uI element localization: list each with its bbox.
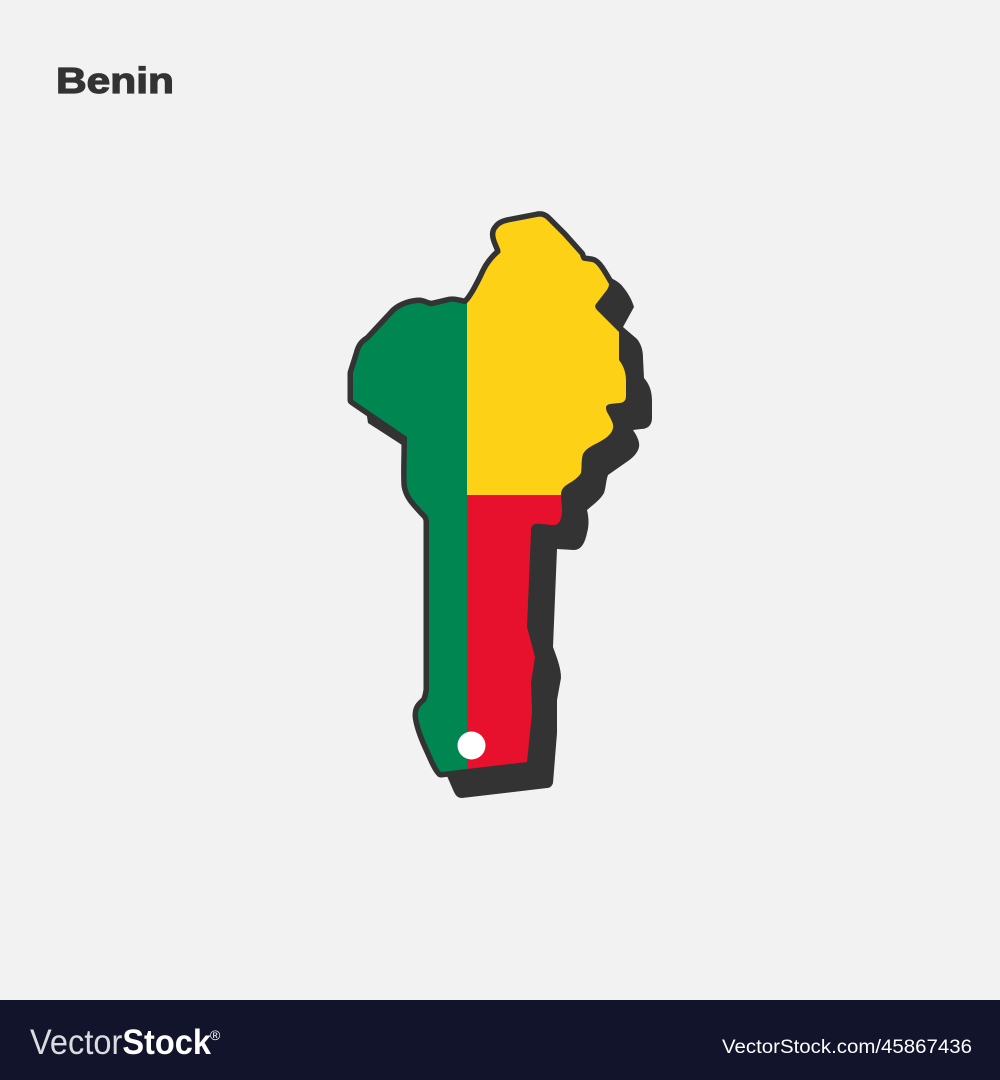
red band: [467, 495, 562, 769]
VectorStock logo: VectorStock: [30, 1023, 211, 1062]
image id: VectorStock.com/45867436: [722, 1037, 972, 1058]
capital marker: [458, 732, 486, 760]
map drop shadow: [447, 270, 652, 798]
flag fill: [353, 216, 626, 772]
registered mark: ®: [210, 1027, 221, 1043]
map outline: [353, 217, 626, 772]
map of Benin with flag colours: [340, 200, 667, 800]
footer bar: [0, 1000, 1000, 1080]
yellow band: [467, 216, 626, 495]
left edge shadow: [366, 410, 412, 480]
title: Benin: [56, 60, 174, 101]
green band: [353, 302, 467, 772]
